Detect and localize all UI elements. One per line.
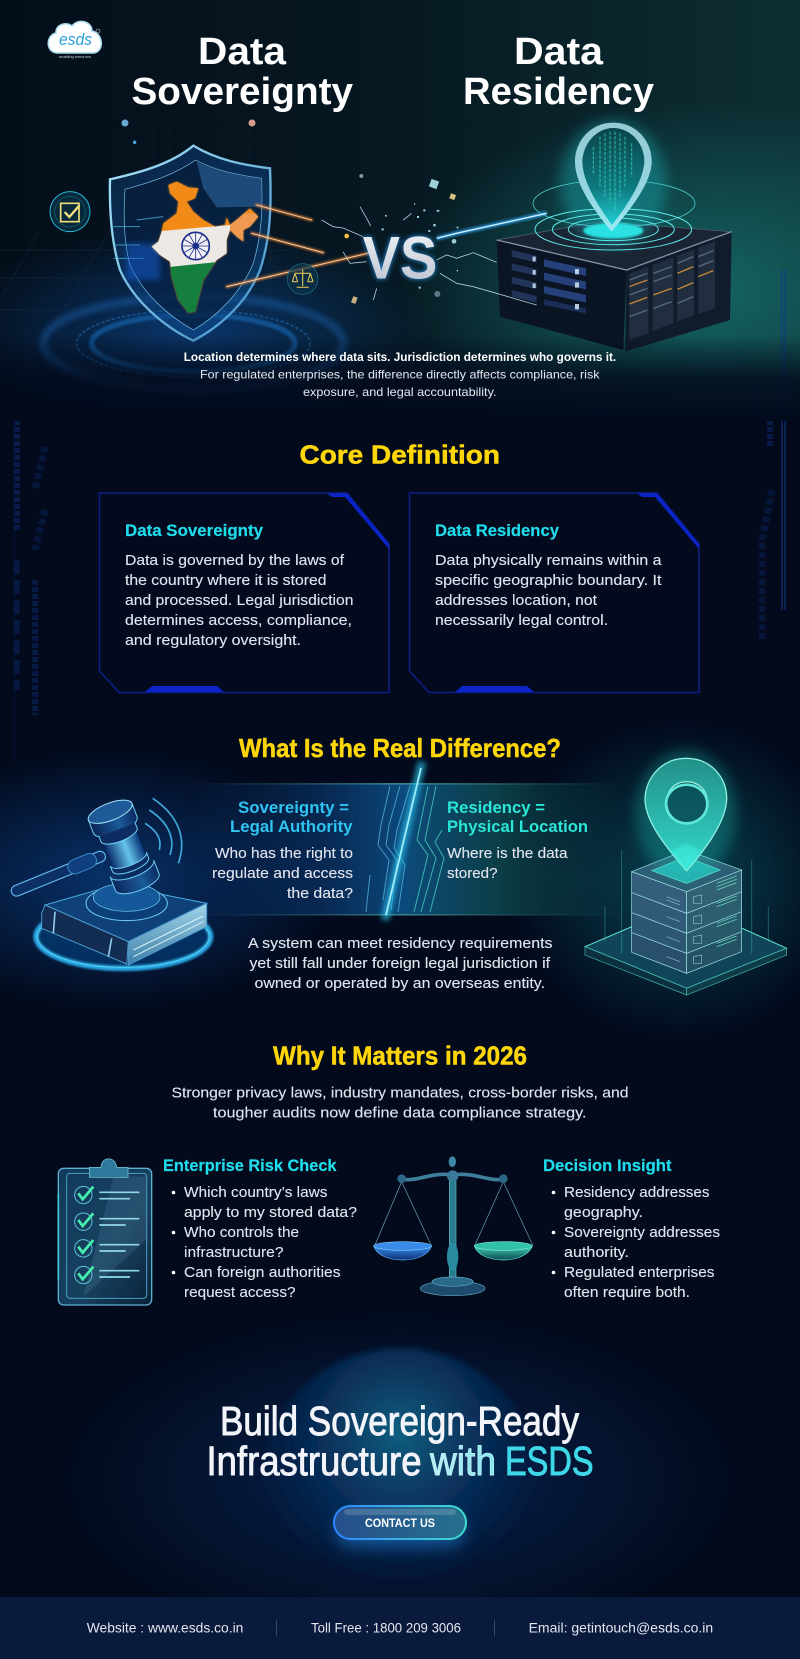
button: contact us: CONTACT US <box>365 1518 435 1530</box>
heading: Core Definition: Core Definition <box>300 440 500 470</box>
intro text <box>184 350 616 399</box>
illustration: server with location pin <box>497 120 732 352</box>
card body: specific geographic boundary. It <box>435 572 662 589</box>
icon: checkbox <box>50 192 90 232</box>
logo: esds cloud <box>48 21 101 59</box>
left pan <box>374 1242 432 1260</box>
icon: clipboard checklist <box>58 1159 152 1305</box>
CTA heading: with <box>429 1438 496 1484</box>
right pan <box>474 1242 532 1260</box>
VS letters: VS <box>363 223 437 291</box>
checklist rows <box>75 1186 139 1284</box>
panel: residency comparison <box>447 798 588 882</box>
panel: Decision Insight: often require both. <box>564 1284 690 1301</box>
shield body <box>110 146 271 341</box>
location pin <box>645 758 727 871</box>
glow ring <box>36 905 211 968</box>
illustration: shield with India map <box>43 130 373 390</box>
card body: Data physically remains within a <box>435 552 662 569</box>
heading: Why It Matters in 2026: Why It Matters in 2026 <box>273 1040 527 1070</box>
panel: Decision Insight: Regulated enterprises <box>564 1264 714 1281</box>
footer bar: Toll Free : 1800 209 3006 <box>311 1620 461 1636</box>
hero fade overlay <box>0 335 800 421</box>
footer bar <box>0 1597 800 1659</box>
CTA background glow <box>60 1310 740 1650</box>
panel: Enterprise Risk Check: Which country’s laws <box>184 1184 328 1201</box>
CTA heading: Infrastructure <box>206 1438 422 1484</box>
intro text: exposure, and legal accountability. <box>303 385 496 399</box>
debris <box>344 174 458 304</box>
panel: sovereignty comparison: Legal Authority <box>230 817 353 836</box>
VS glow: VS <box>363 223 437 291</box>
title: Data Sovereignty <box>132 31 353 113</box>
panel: Decision Insight: Residency addresses <box>564 1184 710 1201</box>
data dots <box>133 130 250 170</box>
footer bar: Email: getintouch@esds.co.in <box>529 1620 713 1636</box>
motion arcs <box>145 798 182 863</box>
callout text: yet still fall under foreign legal jurisdiction if <box>250 955 551 972</box>
callout text <box>248 935 552 992</box>
panel: residency comparison: Physical Location <box>447 817 588 836</box>
panel: Decision Insight: Decision Insight <box>543 1156 672 1175</box>
panel: Decision Insight: Sovereignty addresses <box>564 1224 720 1241</box>
panel: residency comparison: Residency = <box>447 798 545 817</box>
hero data dots top <box>122 120 256 126</box>
card body: determines access, compliance, <box>125 612 352 629</box>
title: Data Sovereignty: Sovereignty <box>132 71 353 113</box>
footer bar: Website : www.esds.co.in <box>87 1620 243 1636</box>
panel: Decision Insight <box>543 1156 720 1301</box>
card body: Data is governed by the laws of <box>125 552 345 569</box>
title: Data Residency: Data <box>514 31 604 73</box>
title: Data Residency: Residency <box>463 71 654 113</box>
sound block <box>86 883 167 921</box>
server layers <box>632 850 742 973</box>
left face units <box>512 250 586 313</box>
hero background glow <box>0 0 800 392</box>
card body: addresses location, not <box>435 592 598 609</box>
callout text: owned or operated by an overseas entity. <box>254 975 545 992</box>
vertical divider <box>393 105 407 340</box>
panel: sovereignty comparison: Who has the right to <box>215 845 353 862</box>
why it matters intro: tougher audits now define data compliance strategy. <box>213 1104 586 1122</box>
panel: sovereignty comparison: Sovereignty = <box>238 798 349 817</box>
panel: residency comparison: Where is the data <box>447 845 568 862</box>
CTA heading: ESDS <box>505 1438 594 1484</box>
icon: balance scales <box>374 1156 533 1296</box>
card heading: Data Residency <box>435 521 560 540</box>
pin glow <box>636 750 736 877</box>
logo: esds cloud: enabling tomorrow <box>59 55 92 59</box>
lightning bolts <box>322 207 537 305</box>
card body <box>125 552 354 649</box>
panel: Enterprise Risk Check <box>163 1156 357 1301</box>
why it matters intro: Stronger privacy laws, industry mandates, cross-border risks, and <box>172 1084 628 1102</box>
blue beam <box>437 213 547 238</box>
panel: Enterprise Risk Check: apply to my stored data? <box>184 1204 357 1221</box>
card body: the country where it is stored <box>125 572 326 589</box>
illustration: gavel on book <box>17 795 211 968</box>
panel: Enterprise Risk Check: Who controls the <box>184 1224 299 1241</box>
intro text: Location determines where data sits. Jurisdiction determines who governs it. <box>184 350 616 364</box>
panel: Decision Insight: geography. <box>564 1204 643 1221</box>
logo: esds cloud: esds <box>59 30 92 49</box>
card body: and regulatory oversight. <box>125 632 301 649</box>
side decoration: circuit bars <box>14 270 785 760</box>
right face units <box>629 242 715 340</box>
CTA heading: Build Sovereign-Ready <box>220 1398 579 1444</box>
VS centre with lightning <box>322 105 547 340</box>
panel: Enterprise Risk Check: Enterprise Risk Check <box>163 1156 337 1175</box>
callout text: A system can meet residency requirements <box>248 935 552 952</box>
server rack <box>497 222 732 352</box>
illustration: pin on server stack <box>585 750 787 995</box>
panel: Data Sovereignty <box>100 493 389 692</box>
location pin <box>575 123 652 232</box>
panel: Enterprise Risk Check: infrastructure? <box>184 1244 284 1261</box>
panel: Enterprise Risk Check: request access? <box>184 1284 296 1301</box>
holographic rings <box>533 180 695 250</box>
button: contact us <box>334 1506 466 1546</box>
heading: What Is the Real Difference?: What Is the Real Difference? <box>239 733 561 763</box>
icon: small scale <box>287 264 318 294</box>
intro text: For regulated enterprises, the difference directly affects compliance, risk <box>200 368 601 382</box>
panel: sovereignty comparison: regulate and access <box>212 865 353 882</box>
gavel head <box>85 795 162 899</box>
difference section glows <box>0 720 800 1040</box>
panel: Enterprise Risk Check: Can foreign authorities <box>184 1264 340 1281</box>
base <box>420 1281 485 1296</box>
panel: Data Residency <box>410 493 699 692</box>
CTA heading <box>206 1398 594 1484</box>
card body: and processed. Legal jurisdiction <box>125 592 354 609</box>
circuit divider beam <box>366 762 444 920</box>
base platform <box>585 850 787 995</box>
book <box>42 885 207 965</box>
orange laser beams <box>227 205 373 287</box>
panel: sovereignty comparison <box>212 798 353 902</box>
card body: necessarily legal control. <box>435 612 608 629</box>
title: Data Sovereignty: Data <box>198 31 287 73</box>
rings beneath shield <box>43 297 343 390</box>
why it matters intro <box>172 1084 628 1122</box>
panel: residency comparison: stored? <box>447 865 498 882</box>
card body <box>435 552 662 629</box>
India map flag <box>150 180 260 314</box>
title: Data Residency <box>463 31 654 113</box>
pin glow <box>560 120 667 247</box>
panel: sovereignty comparison: the data? <box>287 885 353 902</box>
panel: Decision Insight: authority. <box>564 1244 629 1261</box>
gavel handle <box>17 857 100 891</box>
card heading: Data Sovereignty <box>125 521 264 540</box>
